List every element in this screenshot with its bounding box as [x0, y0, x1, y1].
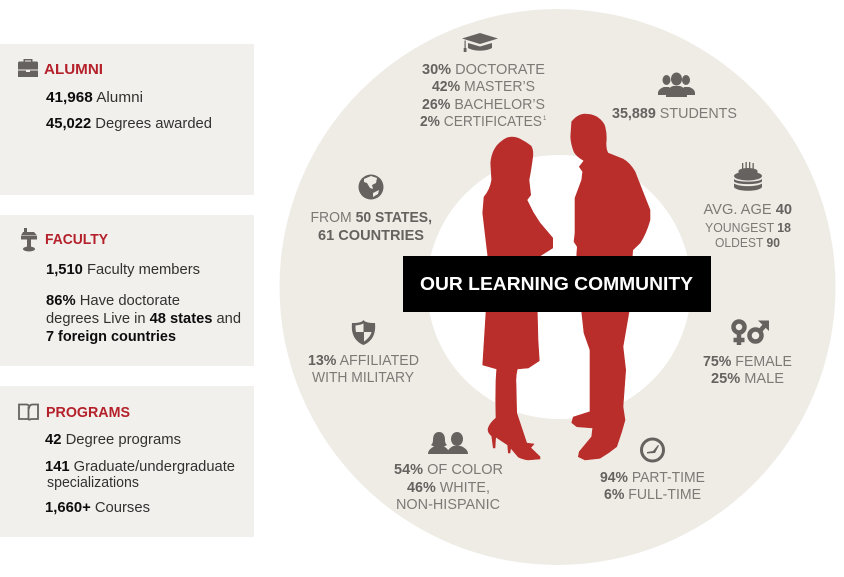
heading: programs: PROGRAMS	[46, 404, 130, 421]
title banner	[403, 256, 711, 312]
community ring	[280, 9, 836, 565]
icon: briefcase	[18, 59, 38, 77]
text: alumni count: 41,968 Alumni	[46, 89, 143, 106]
title banner: OUR LEARNING COMMUNITY	[420, 274, 693, 294]
text: faculty members: 1,510 Faculty members	[46, 261, 200, 278]
text: degree programs: 42 Degree programs	[45, 431, 181, 448]
text: degree mix: 42% MASTER’S	[432, 78, 535, 95]
text: specializations: 141 Graduate/undergraduate	[45, 458, 235, 475]
icon: globe	[358, 174, 384, 200]
heading: alumni: ALUMNI	[44, 61, 103, 78]
text: degree mix: 2% CERTIFICATES	[420, 113, 542, 130]
text: enrollment status: 94% PART-TIME	[600, 469, 705, 486]
icon: clock	[642, 439, 664, 461]
icon: group of students	[658, 72, 695, 97]
icon: graduation cap	[462, 33, 498, 52]
text: age	[704, 201, 792, 250]
text: doctorate degrees and locations: 7 foreign countries	[46, 328, 176, 345]
text: military	[308, 352, 419, 386]
text: doctorate degrees and locations	[46, 292, 241, 345]
text: ethnicity: 46% WHITE,	[407, 479, 490, 496]
text: military: 13% AFFILIATED	[308, 352, 419, 369]
text: age: YOUNGEST 18	[705, 220, 791, 235]
text: ethnicity: 54% OF COLOR	[394, 461, 503, 478]
text: doctorate degrees and locations: degrees Live in 48 states and	[46, 310, 241, 327]
text: degrees awarded: 45,022 Degrees awarded	[46, 115, 212, 132]
text: degree mix: 30% DOCTORATE	[422, 61, 545, 78]
text: specializations: specializations	[47, 474, 139, 491]
icon: open book	[19, 404, 38, 420]
text: degree mix: 26% BACHELOR’S	[422, 96, 545, 113]
icon: gender symbols	[734, 320, 769, 345]
text: ethnicity	[394, 461, 503, 513]
panel: alumni	[0, 44, 254, 195]
heading: faculty: FACULTY	[45, 231, 108, 248]
text: degree mix	[420, 61, 547, 130]
icon: two people	[428, 432, 468, 454]
text: age: OLDEST 90	[715, 235, 780, 250]
text: enrollment status: 6% FULL-TIME	[604, 486, 701, 503]
text: gender: 75% FEMALE	[703, 353, 792, 370]
text: gender: 25% MALE	[711, 370, 784, 387]
text: ethnicity: NON-HISPANIC	[396, 496, 500, 513]
text: enrollment status	[600, 469, 705, 503]
icon: shield	[352, 320, 375, 345]
icon: birthday cake	[734, 162, 762, 191]
text: origins: 61 COUNTRIES	[318, 227, 424, 244]
text: students: 35,889 STUDENTS	[612, 105, 737, 122]
silhouette: woman	[483, 137, 553, 460]
text: origins	[310, 209, 432, 244]
text: age: AVG. AGE 40	[704, 201, 792, 218]
text: military: WITH MILITARY	[312, 369, 414, 386]
text: specializations	[45, 458, 235, 491]
text: degree mix: 1	[543, 116, 547, 122]
text: courses: 1,660+ Courses	[45, 499, 150, 516]
icon: lectern	[21, 228, 37, 252]
text: gender	[703, 353, 792, 387]
text: doctorate degrees and locations: 86% Have doctorate	[46, 292, 180, 309]
text: origins: FROM 50 STATES,	[310, 209, 432, 226]
panel: programs	[0, 386, 254, 537]
panel: faculty	[0, 215, 254, 366]
silhouette: man	[571, 114, 650, 460]
